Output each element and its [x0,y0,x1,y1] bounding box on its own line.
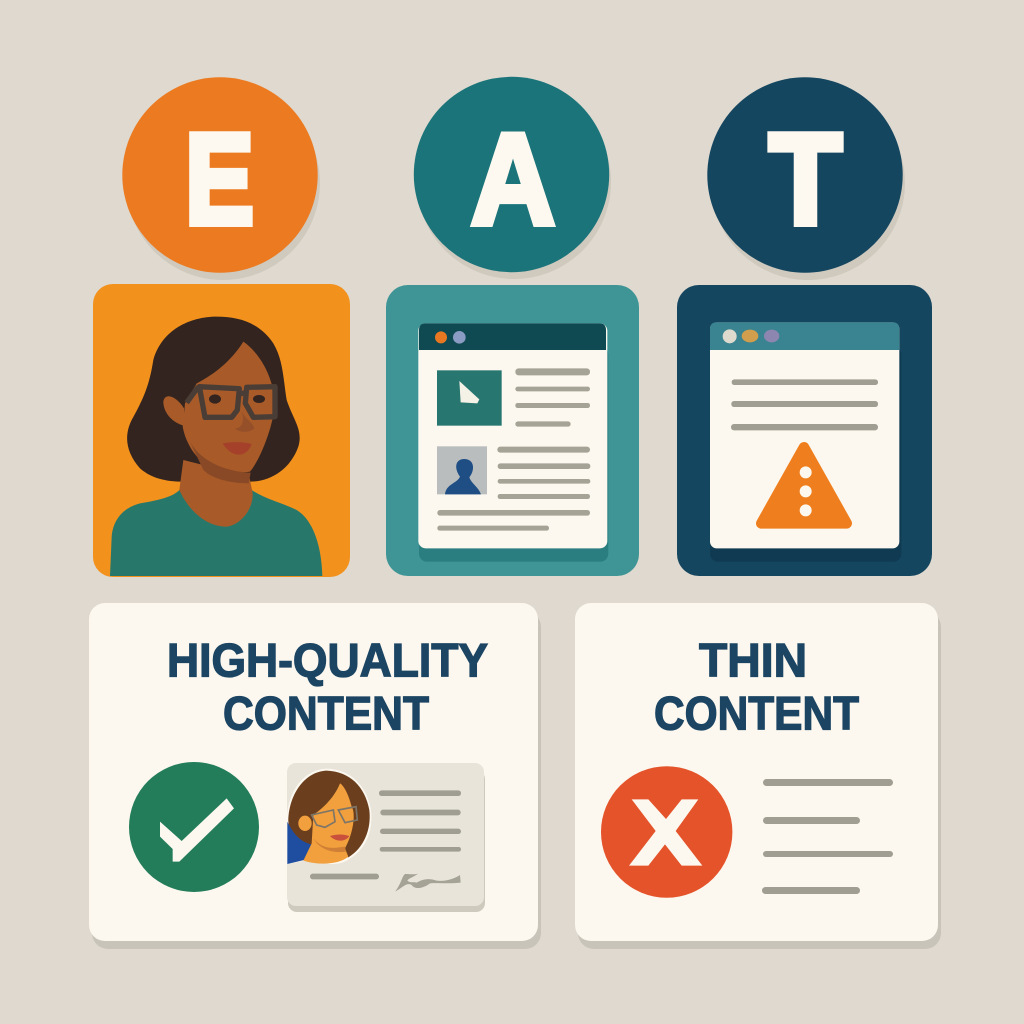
browser dots [723,329,779,343]
illustration: face [183,342,275,472]
panel: expertise author portrait [93,284,350,577]
illustration: glasses [187,387,275,417]
illustration: eyes [209,394,265,404]
browser header [419,323,606,350]
panel: authoritative article page [386,285,639,576]
badge: E: E [185,106,254,251]
badge: T [707,77,905,280]
browser window [710,322,899,548]
text lines [515,368,590,427]
illustration: teal shirt [110,489,322,576]
text lines [731,379,878,430]
heading: high-quality content: HIGH-QUALITY [167,634,488,686]
browser header [710,322,899,350]
illustration: hair [127,317,300,482]
heading: thin content [654,634,859,740]
heading: high-quality content [167,634,488,740]
browser dots [435,331,466,344]
article lines [437,447,590,531]
panel: high-quality content [89,603,541,949]
illustration: nose [235,412,254,432]
signature [395,873,461,892]
card lines [310,790,461,879]
heading: thin content: THIN [699,634,807,686]
illustration: lips [223,442,252,455]
browser window [418,323,607,548]
window shadow [419,347,608,562]
thin text lines [762,779,893,894]
icon: warning triangle [761,447,847,523]
panel: trust warning page [677,285,932,576]
illustration: ear [163,396,184,426]
window shadow [710,347,901,562]
illustration: jaw shadow [190,442,251,483]
badge: A: A [471,107,555,252]
heading: thin content: CONTENT [654,686,859,740]
icon: green check [129,762,259,892]
heading: high-quality content: CONTENT [223,686,429,740]
illustration: neck [179,460,253,527]
panel: thin content [575,603,941,949]
icon: red X [601,766,732,898]
badge: A [414,77,611,279]
portrait [287,769,371,864]
thumbnail image [437,370,502,426]
badge: T: T [769,108,842,252]
author ID card [287,763,485,912]
badge: E [122,77,320,280]
author photo [437,446,487,494]
